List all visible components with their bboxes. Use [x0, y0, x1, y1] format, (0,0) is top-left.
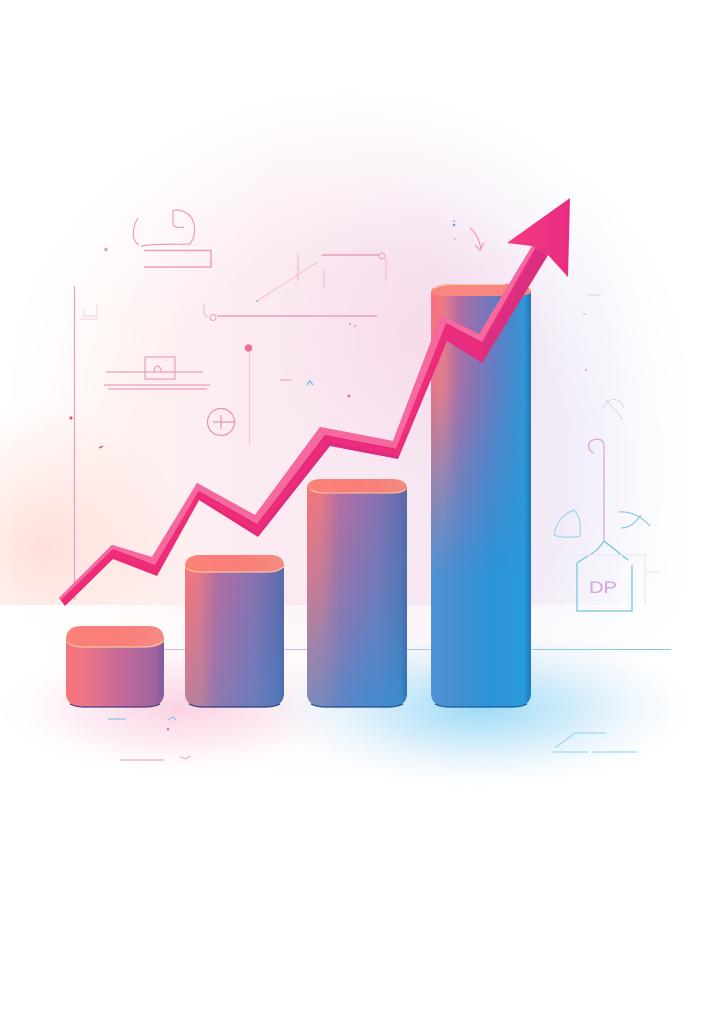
growth arrow	[59, 198, 570, 606]
small curved arrow	[470, 228, 484, 250]
growth chart infographic	[0, 149, 671, 774]
line sketches: right faint marks	[583, 295, 624, 420]
line sketches: boxed device with rails	[104, 357, 210, 389]
bar 3	[307, 479, 407, 707]
line sketches: top-centre diagram	[204, 253, 386, 327]
pin marker	[245, 344, 252, 445]
bar 4	[431, 284, 531, 707]
lower sketch marks	[108, 717, 637, 760]
bar 2	[185, 555, 284, 707]
house sketch with hook	[554, 439, 660, 611]
line sketches: top-left device	[105, 210, 211, 267]
house sketch with hook: DP	[589, 578, 617, 597]
icon: plus circle	[208, 408, 234, 436]
vertical axis	[69, 286, 103, 600]
bar 1	[66, 626, 164, 707]
background glow	[0, 149, 658, 774]
arrow head	[507, 198, 570, 277]
small marks	[280, 220, 456, 398]
arrow shaft	[59, 246, 548, 606]
baseline	[164, 648, 671, 650]
